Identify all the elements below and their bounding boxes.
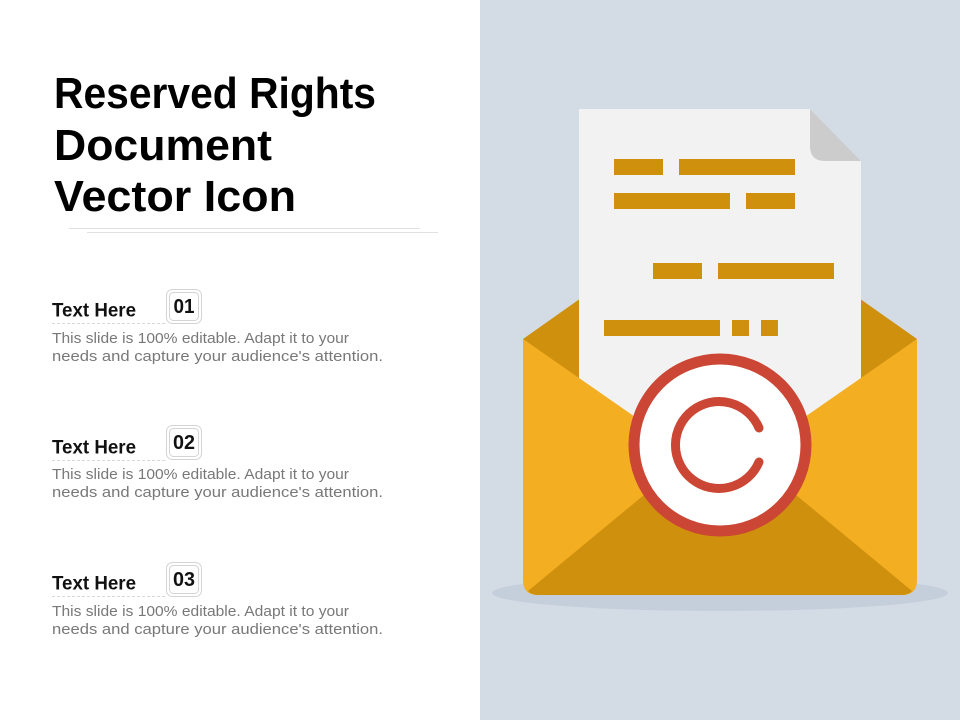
right background panel [480, 0, 960, 720]
item 03 number badge: 03 [173, 569, 195, 591]
item 01 number badge: 01 [174, 296, 194, 318]
title: Vector Icon [54, 172, 296, 221]
envelope front [523, 339, 917, 595]
item 02 description [52, 466, 383, 501]
item 01 number badge [166, 290, 202, 324]
document text lines [604, 159, 834, 336]
item 02 number badge: 02 [173, 432, 195, 454]
item 01 description [52, 330, 383, 365]
item 02 number badge [166, 426, 202, 460]
item 03 description [52, 603, 383, 638]
envelope shadow [492, 575, 948, 611]
document folded corner [810, 109, 861, 161]
item 01 description: This slide is 100% editable. Adapt it to your [52, 330, 349, 347]
title: Reserved Rights [54, 69, 376, 118]
item 03 description: This slide is 100% editable. Adapt it to your [52, 603, 349, 620]
item 02 description: needs and capture your audience's attention. [52, 484, 383, 501]
item 03 heading: Text Here [52, 574, 136, 594]
icon: envelope with document and copyright seal [492, 109, 948, 611]
item 02 heading: Text Here [52, 438, 136, 458]
item 01 description: needs and capture your audience's attention. [52, 348, 383, 365]
item 03 number badge [166, 562, 202, 596]
copyright seal [634, 359, 806, 531]
item 02 [52, 426, 383, 501]
item 03 description: needs and capture your audience's attention. [52, 621, 383, 638]
title [54, 69, 376, 221]
document [579, 109, 861, 440]
item 03 [52, 562, 383, 638]
item 01 [52, 290, 383, 365]
envelope bottom flap [528, 432, 912, 595]
item 01 heading: Text Here [52, 300, 136, 322]
envelope back flap [523, 200, 917, 480]
item 02 description: This slide is 100% editable. Adapt it to your [52, 466, 349, 483]
title: Document [54, 121, 272, 170]
